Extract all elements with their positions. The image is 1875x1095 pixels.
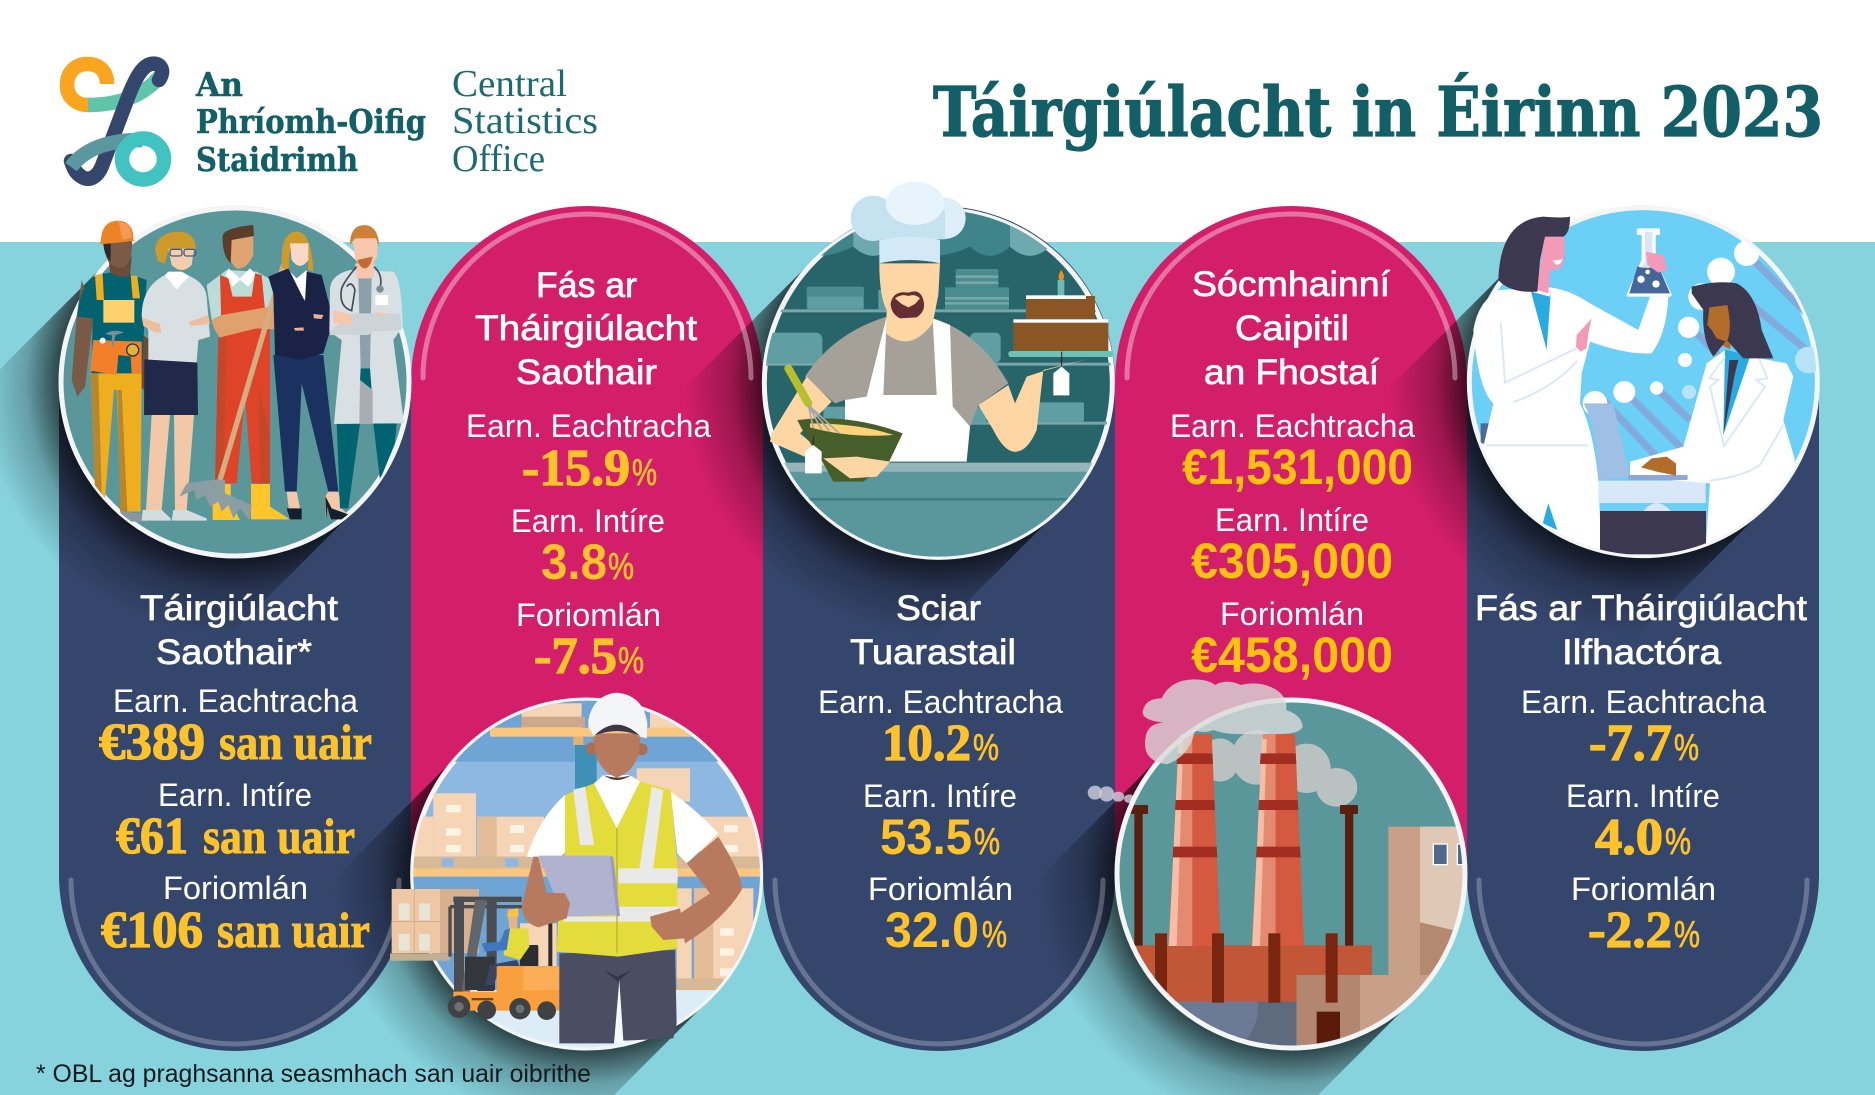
text block: Sócmhainní Caipitil an Fhostaí: €305,000	[1191, 533, 1393, 589]
logo wordmark: English: Office	[452, 138, 545, 180]
text block: Táirgiúlacht Saothair: san uair	[203, 808, 355, 864]
bakery shelves and awning	[766, 212, 1111, 557]
text block: Fás ar Tháirgiúlacht Saothair: Saothair	[516, 353, 657, 392]
pallet of boxes	[390, 889, 479, 961]
text block: Táirgiúlacht Saothair: €106	[101, 902, 203, 959]
worker: doctor	[329, 225, 404, 508]
text block: Sócmhainní Caipitil an Fhostaí: Earn. Eachtracha	[1170, 408, 1415, 444]
logo wordmark: Irish: An	[195, 65, 243, 104]
text block: Fás ar Tháirgiúlacht Ilfhactóra: %	[1665, 821, 1691, 862]
text block: Sciar Tuarastail	[818, 589, 1063, 958]
text block: Sócmhainní Caipitil an Fhostaí: Caipitil	[1235, 309, 1349, 348]
text block: Sciar Tuarastail: Earn. Eachtracha	[818, 684, 1063, 720]
smoke clouds over chimneys	[1143, 679, 1303, 764]
chef hat	[851, 182, 966, 263]
text block: Sciar Tuarastail: %	[982, 914, 1007, 955]
flask	[1628, 230, 1670, 295]
text block: Fás ar Tháirgiúlacht Ilfhactóra: Earn. Intíre	[1566, 778, 1720, 814]
text block: Fás ar Tháirgiúlacht Ilfhactóra: -2.2	[1588, 902, 1672, 959]
text block: Fás ar Tháirgiúlacht Saothair: Earn. Intíre	[511, 503, 665, 539]
text block: Fás ar Tháirgiúlacht Ilfhactóra: Foriomlán	[1571, 871, 1716, 907]
worker: businesswoman	[268, 232, 350, 520]
text block: Táirgiúlacht Saothair: san uair	[217, 902, 370, 958]
text block: Sócmhainní Caipitil an Fhostaí	[1170, 265, 1415, 683]
baker figure	[805, 263, 1090, 462]
man in hi-vis vest with clipboard	[522, 693, 742, 1043]
text block: Táirgiúlacht Saothair: Táirgiúlacht	[140, 589, 338, 628]
text block: Fás ar Tháirgiúlacht Saothair: Tháirgiúlacht	[475, 309, 697, 348]
logo wordmark: Irish: Phríomh-Oifig	[196, 102, 426, 141]
logo: CSO mark	[67, 64, 164, 180]
logo wordmark: Irish: Staidrimh	[196, 140, 358, 179]
text block: Sciar Tuarastail: %	[973, 727, 999, 768]
scientist: left with flask	[1470, 217, 1668, 557]
text block: Sciar Tuarastail: 10.2	[882, 715, 971, 772]
text block: Fás ar Tháirgiúlacht Ilfhactóra: Ilfhactóra	[1562, 633, 1722, 672]
text block: Fás ar Tháirgiúlacht Saothair: %	[608, 546, 634, 587]
text block: Sócmhainní Caipitil an Fhostaí: €458,000	[1191, 627, 1393, 683]
cake on tray	[1008, 270, 1113, 395]
text block: Fás ar Tháirgiúlacht Ilfhactóra: Fás ar Tháirgiúlacht	[1475, 589, 1807, 628]
text block: Fás ar Tháirgiúlacht Ilfhactóra: 4.0	[1595, 809, 1663, 866]
text block: Táirgiúlacht Saothair: €61	[116, 808, 188, 865]
text block: Sciar Tuarastail: 32.0	[885, 902, 979, 958]
text block: Táirgiúlacht Saothair: Earn. Intíre	[158, 777, 312, 813]
illustration: baker with cake	[760, 182, 1130, 572]
logo wordmark: English: Statistics	[452, 100, 598, 142]
mixing bowl and whisk	[770, 368, 903, 482]
text block: Fás ar Tháirgiúlacht Saothair: -15.9	[522, 440, 630, 497]
logo wordmark: Irish	[195, 65, 426, 179]
logo wordmark: English	[452, 63, 598, 180]
text block: Sciar Tuarastail: Sciar	[896, 589, 981, 628]
text block: Fás ar Tháirgiúlacht Ilfhactóra: -7.7	[1589, 715, 1672, 772]
text block: Táirgiúlacht Saothair: Foriomlán	[163, 870, 308, 906]
text block: Fás ar Tháirgiúlacht Ilfhactóra	[1475, 589, 1807, 959]
background band	[0, 242, 1875, 1095]
text block: Sciar Tuarastail: Foriomlán	[868, 871, 1013, 907]
logo wordmark: English: Central	[452, 63, 567, 105]
text block: Sciar Tuarastail: 53.5	[880, 809, 972, 865]
chimneys	[1130, 734, 1358, 1003]
text block: Sócmhainní Caipitil an Fhostaí: Earn. Intíre	[1215, 502, 1369, 538]
worker: tradesman	[72, 221, 151, 522]
worker: gardener with rake	[179, 225, 290, 520]
illustration: scientists in lab	[1469, 208, 1822, 557]
text block: Fás ar Tháirgiúlacht Saothair: %	[632, 452, 657, 493]
illustration: factory	[1088, 679, 1469, 1052]
text block: Fás ar Tháirgiúlacht Saothair	[466, 266, 711, 685]
text block: Fás ar Tháirgiúlacht Ilfhactóra: Earn. Eachtracha	[1521, 684, 1766, 720]
illustration: five workers	[61, 206, 409, 556]
footnote: * OBL ag praghsanna seasmhach san uair oibrithe	[36, 1060, 591, 1088]
text block: Fás ar Tháirgiúlacht Saothair: %	[618, 640, 644, 681]
factory buildings	[1137, 827, 1469, 1052]
forklift	[448, 897, 560, 1020]
text block: Sócmhainní Caipitil an Fhostaí: €1,531,000	[1182, 439, 1413, 495]
text block: Sócmhainní Caipitil an Fhostaí: an Fhostaí	[1204, 353, 1379, 392]
pill panels	[59, 206, 1819, 1051]
text block: Fás ar Tháirgiúlacht Saothair: Earn. Eachtracha	[466, 408, 711, 444]
text block: Táirgiúlacht Saothair	[99, 589, 372, 959]
small smoke puff	[1088, 786, 1135, 803]
decorative arcs inside pills	[71, 214, 1807, 1044]
text block: Táirgiúlacht Saothair: san uair	[219, 714, 372, 770]
text block: Sciar Tuarastail: Earn. Intíre	[863, 778, 1017, 814]
text block: Táirgiúlacht Saothair: Saothair*	[156, 633, 312, 672]
text block: Fás ar Tháirgiúlacht Saothair: Foriomlán	[516, 597, 661, 633]
DNA helix background	[1481, 241, 1822, 457]
illustration: warehouse worker and forklift	[390, 690, 780, 1057]
text block: Sócmhainní Caipitil an Fhostaí: Foriomlán	[1220, 596, 1364, 632]
text block: Fás ar Tháirgiúlacht Ilfhactóra: %	[1674, 727, 1699, 768]
text block: Fás ar Tháirgiúlacht Saothair: Fás ar	[536, 266, 637, 305]
laptop and desk	[1583, 403, 1706, 554]
worker: office woman	[142, 232, 210, 521]
text block: Fás ar Tháirgiúlacht Saothair: 3.8	[541, 534, 607, 590]
text block: Táirgiúlacht Saothair: €389	[99, 714, 205, 771]
text block: Sciar Tuarastail: Tuarastail	[850, 633, 1016, 672]
long shadows below circles	[0, 258, 1767, 1095]
scientist: right at laptop	[1628, 282, 1795, 543]
warehouse shelves and boxes	[413, 700, 760, 1048]
text block: Sciar Tuarastail: %	[974, 821, 1000, 862]
text block: Fás ar Tháirgiúlacht Ilfhactóra: %	[1674, 914, 1700, 955]
text block: Sócmhainní Caipitil an Fhostaí: Sócmhainní	[1192, 265, 1390, 304]
text block: Fás ar Tháirgiúlacht Saothair: -7.5	[534, 628, 617, 685]
text block: Táirgiúlacht Saothair: Earn. Eachtracha	[113, 683, 358, 719]
chimney smoke behind	[1201, 730, 1357, 807]
